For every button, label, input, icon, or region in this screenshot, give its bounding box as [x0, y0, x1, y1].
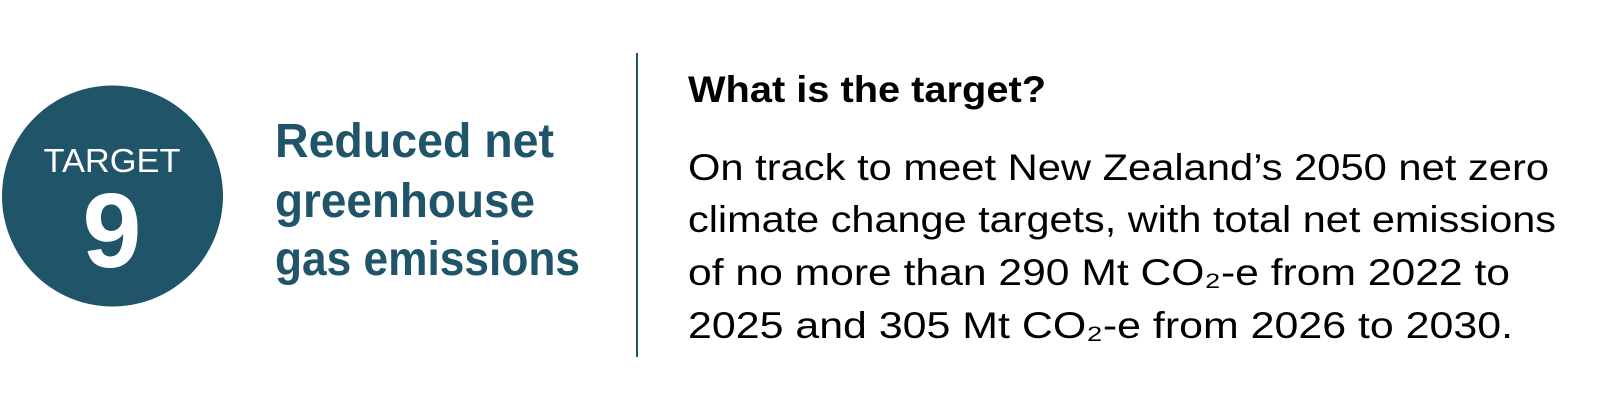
body text: target description: [688, 147, 1556, 346]
body text: target description: On track to meet New Zealand’s 2050 net zero: [688, 147, 1549, 188]
body text: target description: climate change targets, with total net emissions: [688, 199, 1556, 240]
heading: target name: Reduced net: [275, 115, 554, 168]
subheading: what is the target: What is the target?: [688, 69, 1046, 110]
heading: target name: greenhouse: [275, 175, 535, 228]
heading: target name: gas emissions: [275, 233, 580, 286]
body text: target description: 2025 and 305 Mt CO₂-e from 2026 to 2030.: [688, 305, 1513, 346]
badge: target 9: 9: [83, 172, 141, 290]
body text: target description: of no more than 290 Mt CO₂-e from 2022 to: [688, 252, 1510, 293]
heading: target name: [275, 115, 580, 286]
badge: target 9: TARGET: [44, 142, 180, 179]
badge: target 9: [2, 86, 223, 306]
